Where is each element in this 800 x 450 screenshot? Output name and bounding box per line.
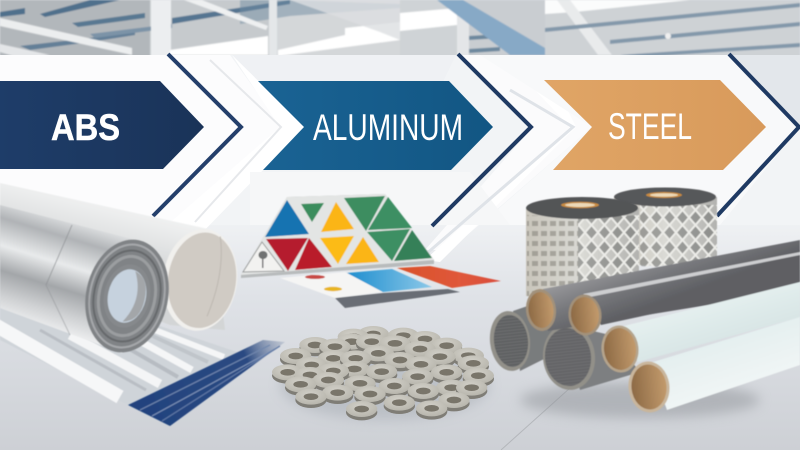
white triangle with tree xyxy=(243,242,284,272)
chevron line 1 xyxy=(153,54,241,216)
steel washers xyxy=(272,326,494,420)
fibre tube right xyxy=(540,321,640,393)
blue edge of sheet xyxy=(128,340,285,426)
yellow triangle up xyxy=(321,202,354,232)
arrow: Aluminum xyxy=(258,81,493,170)
arrow: ABS xyxy=(0,81,204,169)
grey tube rear xyxy=(524,240,800,332)
yellow triangle inverted xyxy=(320,236,354,264)
yellow triangle right xyxy=(346,237,379,264)
banner panel behind arrows xyxy=(0,55,800,262)
white tube upper xyxy=(599,282,800,374)
background: floor xyxy=(0,215,800,450)
mesh roll front xyxy=(526,197,639,300)
arrow: Steel xyxy=(544,80,766,170)
front aluminum coil xyxy=(0,205,179,360)
corrugated aluminum sheet xyxy=(0,300,240,405)
triangle swatch board xyxy=(241,194,434,278)
green triangle upper right xyxy=(368,197,412,230)
fibre tube left xyxy=(487,300,562,373)
arrow: Steel: STEEL xyxy=(608,106,692,147)
red triangle inverted xyxy=(266,238,308,271)
mesh roll back xyxy=(614,188,717,267)
green triangle far right xyxy=(394,230,432,261)
rear aluminum tube xyxy=(0,183,244,336)
arrow: Aluminum: ALUMINUM xyxy=(313,107,463,148)
white tube lower xyxy=(626,317,800,415)
brochure sheets xyxy=(280,266,501,308)
arrow: ABS: ABS xyxy=(51,107,120,148)
blue triangle xyxy=(265,200,309,237)
pipes group xyxy=(487,240,800,415)
small green triangle xyxy=(301,203,324,222)
chevron line 2 xyxy=(432,54,531,226)
floor crack line xyxy=(501,388,570,450)
red triangle up xyxy=(295,238,332,270)
chevron line 3 xyxy=(717,54,799,216)
green triangle large xyxy=(344,196,385,231)
washer shadow xyxy=(280,350,490,420)
green triangle lower xyxy=(367,229,410,261)
grey tube front xyxy=(566,252,800,337)
pipe shadow xyxy=(520,382,760,418)
background: factory ceiling xyxy=(0,0,800,60)
